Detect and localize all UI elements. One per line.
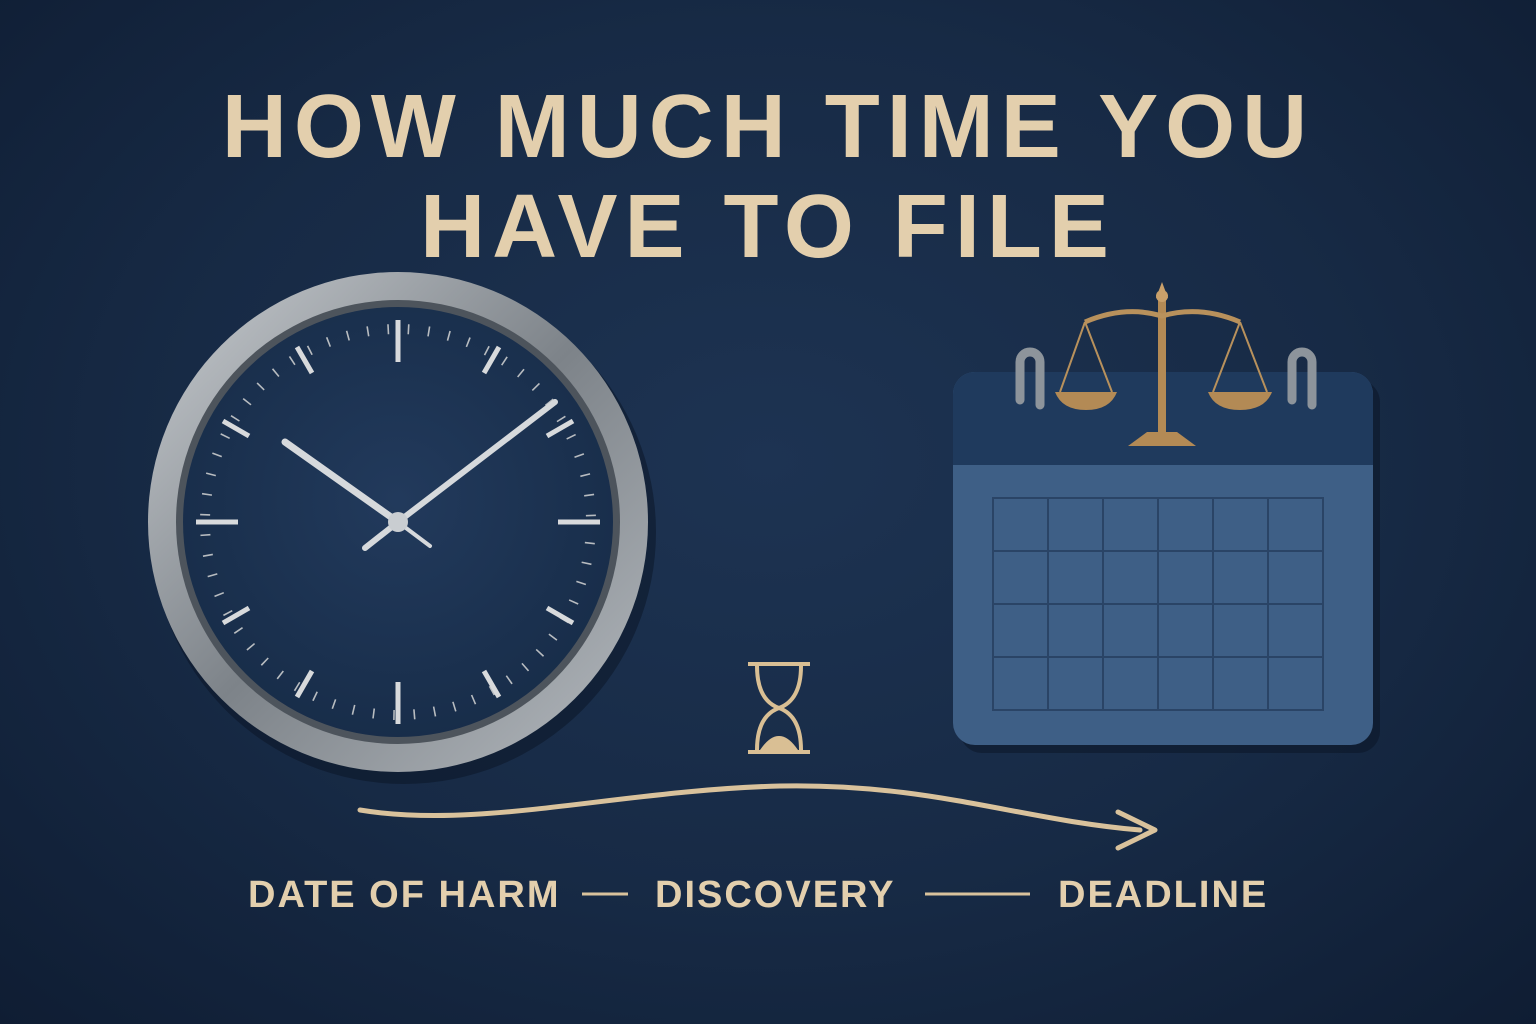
label: deadline: DEADLINE (1058, 874, 1268, 916)
title: HAVE TO FILE (420, 177, 1116, 277)
icon: scales of justice (1055, 282, 1272, 446)
title (222, 77, 1314, 277)
label: date of harm: DATE OF HARM (248, 874, 560, 916)
arrow: timeline (360, 786, 1155, 848)
clock hands (285, 402, 555, 548)
clock (148, 272, 656, 784)
dividers between labels (582, 892, 1030, 896)
icon: hourglass (748, 664, 810, 752)
calendar rings (1020, 352, 1312, 405)
label: discovery: DISCOVERY (655, 874, 895, 916)
calendar (953, 282, 1380, 753)
title: HOW MUCH TIME YOU (222, 77, 1314, 177)
